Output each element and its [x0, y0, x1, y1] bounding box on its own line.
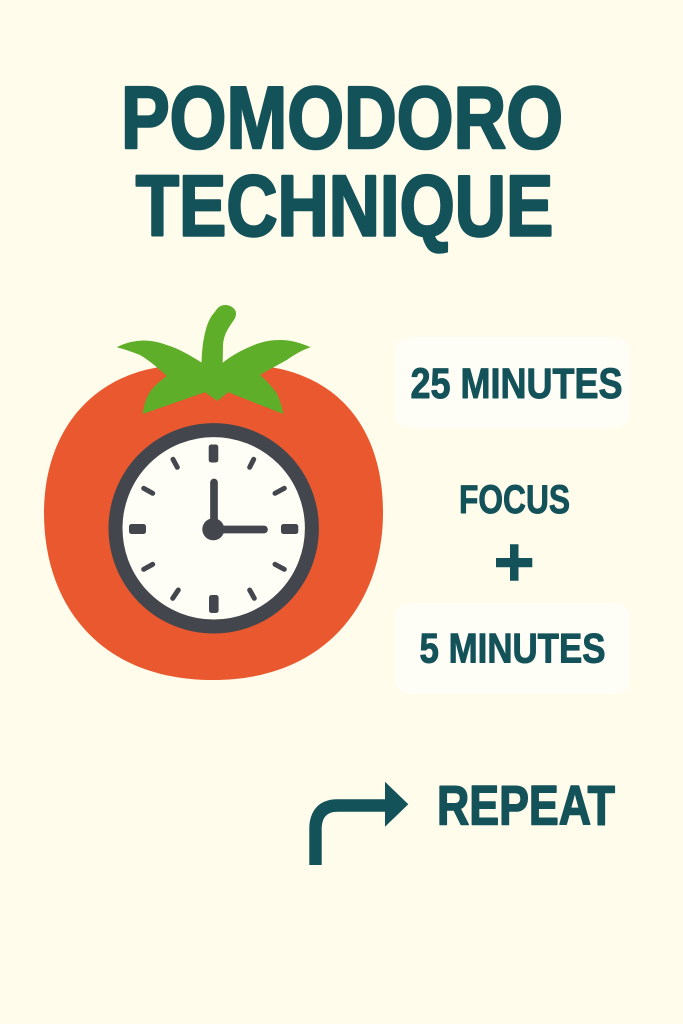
title — [121, 68, 563, 254]
title: TECHNIQUE — [136, 158, 553, 254]
arrow: repeat — [309, 782, 408, 865]
clock ticks — [129, 444, 298, 613]
tomato body — [44, 367, 383, 680]
icon: tomato timer — [44, 305, 383, 680]
tomato leaves and stem — [117, 305, 311, 414]
label: repeat: REPEAT — [437, 773, 615, 836]
title: POMODORO — [121, 68, 563, 167]
icon: plus — [496, 544, 532, 581]
label box: 25 minutes — [395, 337, 630, 428]
label box: 5 minutes — [395, 603, 630, 694]
clock — [116, 430, 312, 626]
label box: 5 minutes: 5 MINUTES — [420, 624, 606, 672]
label: focus: FOCUS — [459, 478, 570, 522]
label box: 25 minutes: 25 MINUTES — [410, 360, 622, 408]
clock hands — [214, 482, 264, 530]
